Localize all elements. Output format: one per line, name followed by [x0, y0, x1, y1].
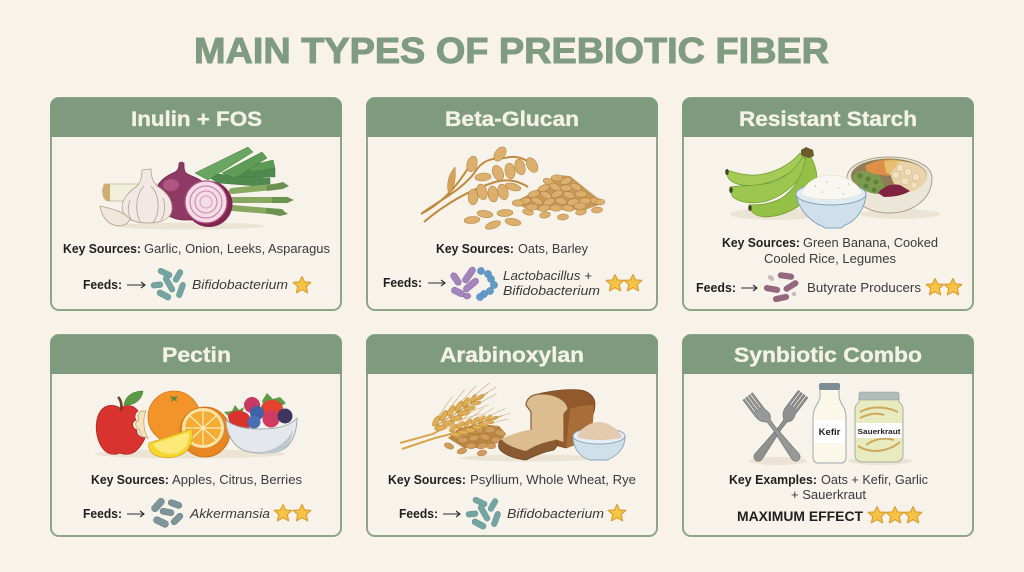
icon: bifidobacterium: [151, 267, 186, 301]
feeds row: [383, 266, 642, 301]
feeds row: Feeds:: [696, 280, 736, 295]
feeds row: Feeds:: [383, 275, 422, 290]
panel: Arabinoxylan: [366, 335, 658, 536]
feeds row: [83, 267, 311, 301]
rating: two stars: [926, 278, 962, 295]
feeds row: Akkermansia: [189, 506, 270, 521]
panel: Resistant Starch: [682, 98, 974, 310]
rating: one star: [608, 504, 626, 521]
sauerkraut label: Sauerkraut: [858, 427, 901, 436]
illustration: forks, kefir, sauerkraut: [743, 383, 912, 465]
title: MAIN TYPES OF PREBIOTIC FIBER: [194, 30, 829, 71]
illustration: apple, citrus, berries: [95, 391, 297, 458]
illustration: garlic, onion, leek, asparagus: [100, 147, 294, 230]
key sources text: Apples, Citrus, Berries: [172, 472, 302, 487]
panel: Synbiotic Combo: [682, 335, 974, 536]
maximum effect text: MAXIMUM EFFECT: [737, 509, 864, 524]
species text: Lactobacillus +: [503, 268, 592, 283]
feeds row: [83, 497, 311, 529]
illustration: wheat, bread, psyllium bowl: [400, 373, 625, 462]
key sources text: [91, 472, 302, 487]
key sources text: Key Sources:: [722, 235, 800, 250]
key sources text: Psyllium, Whole Wheat, Rye: [470, 472, 636, 487]
feeds row: Feeds:: [399, 506, 438, 521]
key sources text: [388, 472, 636, 487]
key sources text: Key Sources:: [63, 241, 141, 256]
key sources text: Cooled Rice, Legumes: [764, 251, 896, 266]
key examples text: [729, 472, 928, 502]
key sources text: Garlic, Onion, Leeks, Asparagus: [144, 241, 330, 256]
icon: butyrate producers: [764, 272, 799, 302]
key examples text: + Sauerkraut: [791, 487, 866, 502]
panel: Pectin: [50, 335, 342, 536]
feeds row: Bifidobacterium: [507, 506, 604, 521]
species text: [503, 268, 600, 298]
feeds row: [696, 272, 962, 302]
rating: three stars: [868, 506, 922, 523]
key examples text: Oats + Kefir, Garlic: [821, 472, 928, 487]
key sources text: Key Sources:: [91, 472, 169, 487]
feeds row: Bifidobacterium: [192, 277, 288, 292]
heading: Resistant Starch: Resistant Starch: [739, 108, 917, 131]
species text: Bifidobacterium: [503, 283, 600, 298]
illustration: oats and grain pile: [421, 145, 605, 231]
key sources text: Key Sources:: [388, 472, 466, 487]
rating: one star: [293, 276, 311, 293]
feeds row: [399, 496, 626, 530]
key sources text: Green Banana, Cooked: [803, 235, 938, 250]
panel: Inulin + FOS: [50, 98, 342, 310]
illustration: green bananas, rice bowl, legumes: [725, 147, 940, 228]
panel: Beta-Glucan: [366, 98, 658, 310]
key sources text: Oats, Barley: [518, 241, 588, 256]
icon: akkermansia: [150, 497, 184, 529]
feeds row: Feeds:: [83, 277, 122, 292]
kefir label: Kefir: [819, 427, 841, 438]
key sources text: [436, 241, 588, 256]
key sources text: Key Sources:: [436, 241, 514, 256]
feeds row: Butyrate Producers: [807, 280, 922, 295]
icon: lactobacillus and bifidobacterium: [449, 266, 498, 301]
heading: Pectin: Pectin: [162, 344, 231, 367]
feeds row: Feeds:: [83, 506, 122, 521]
rating: two stars: [606, 274, 642, 291]
key sources text: [722, 235, 938, 266]
key examples text: Key Examples:: [729, 472, 817, 487]
icon: bifidobacterium: [466, 496, 501, 530]
heading: Beta-Glucan: Beta-Glucan: [445, 108, 579, 131]
rating: two stars: [274, 504, 311, 521]
key sources text: [63, 241, 330, 256]
heading: Inulin + FOS: Inulin + FOS: [131, 108, 262, 131]
heading: Arabinoxylan: Arabinoxylan: [440, 344, 584, 367]
heading: Synbiotic Combo: Synbiotic Combo: [734, 344, 922, 367]
